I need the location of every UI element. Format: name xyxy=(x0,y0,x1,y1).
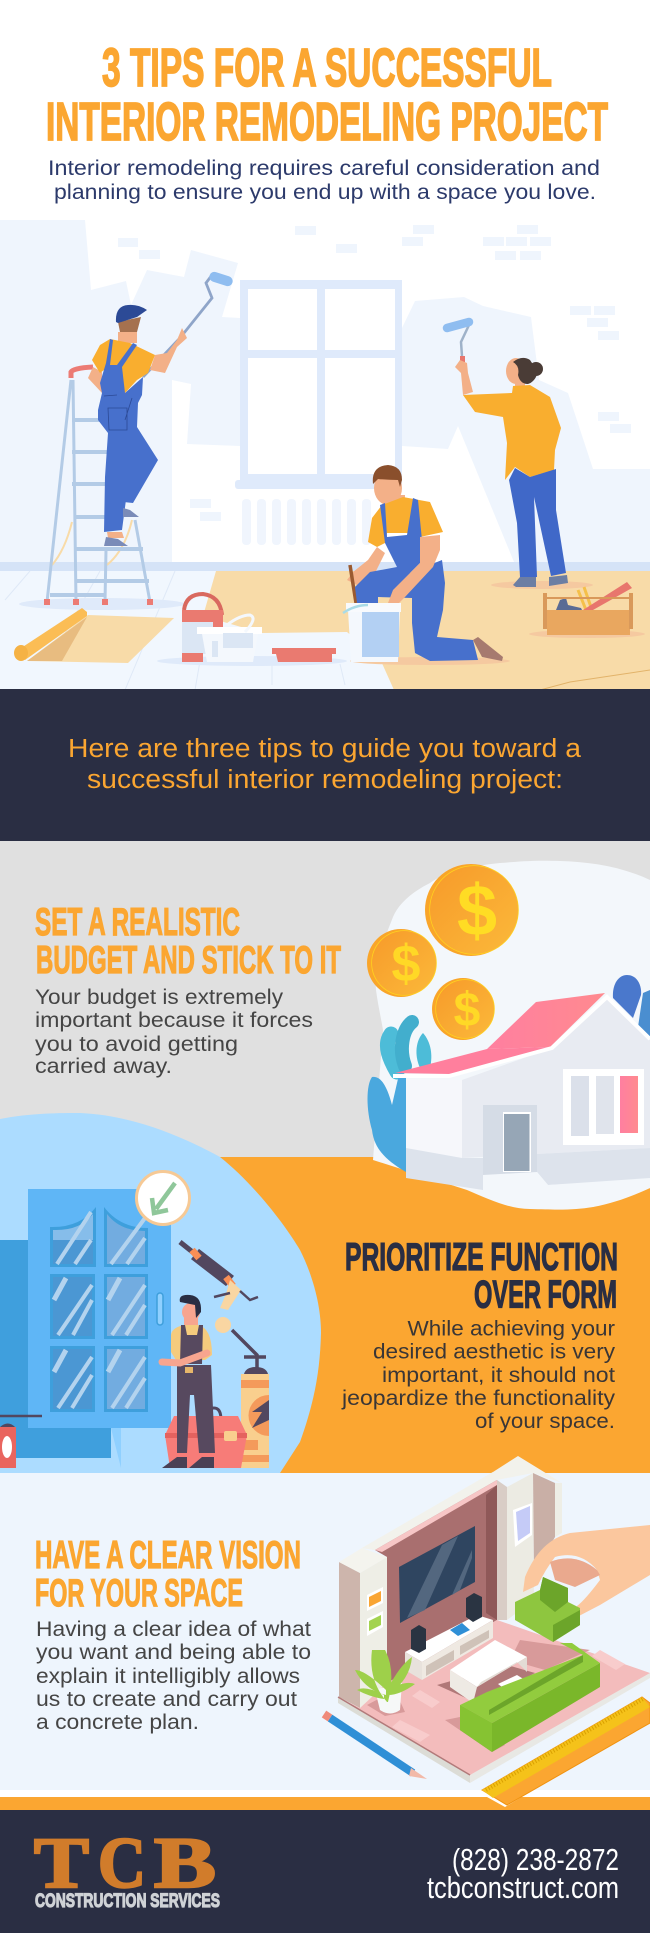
icon: coins: $ xyxy=(454,984,481,1037)
icon: red spray can xyxy=(0,1416,42,1468)
footer stripe xyxy=(0,1797,650,1810)
logo: C xyxy=(98,1823,146,1903)
icon: house xyxy=(393,993,650,1209)
logo: CONSTRUCTION SERVICES xyxy=(35,1891,220,1912)
blob behind house xyxy=(373,861,650,1210)
painter kneeling xyxy=(343,465,510,665)
heading: budget: BUDGET AND STICK TO IT xyxy=(36,939,341,982)
illustration: isometric room model xyxy=(324,1456,650,1807)
paper roll and sheet xyxy=(14,608,174,663)
text: vision: Having a clear idea of what xyxy=(36,1617,311,1641)
painter woman xyxy=(447,322,593,589)
logo xyxy=(34,1823,220,1912)
sofa xyxy=(460,1643,600,1752)
rug and coffee table xyxy=(437,1640,535,1703)
text: function over form: of your space. xyxy=(475,1409,615,1433)
hand and armchair xyxy=(515,1525,650,1642)
text: vision: a concrete plan. xyxy=(36,1710,199,1734)
heading: vision: HAVE A CLEAR VISION xyxy=(35,1534,301,1577)
heading: vision xyxy=(35,1534,301,1615)
icon: red toolbox xyxy=(165,1408,247,1468)
tv xyxy=(399,1526,475,1623)
room floor xyxy=(338,1620,650,1783)
tips intro band: successful interior remodeling project: xyxy=(87,766,563,794)
tips intro band: Here are three tips to guide you toward a xyxy=(68,735,582,763)
heading: function over form xyxy=(345,1236,618,1316)
text: function over form: important, it should not xyxy=(382,1363,615,1387)
text: vision: us to create and carry out xyxy=(36,1687,297,1711)
icon: coins: $ xyxy=(457,871,497,951)
room walls xyxy=(339,1456,562,1708)
floor xyxy=(0,562,650,690)
plant xyxy=(355,1650,415,1714)
text: function over form xyxy=(341,1316,615,1433)
text: vision xyxy=(36,1617,311,1734)
text: budget: you to avoid getting xyxy=(35,1032,238,1056)
door panes xyxy=(50,1207,163,1412)
text: vision: you want and being able to xyxy=(36,1640,311,1664)
icon: coins xyxy=(367,864,518,1040)
door wall shadow xyxy=(0,1240,111,1458)
intro text: Interior remodeling requires careful consideration and xyxy=(48,156,600,180)
intro text xyxy=(48,156,600,204)
panel: budget xyxy=(0,841,650,1473)
heading: budget: SET A REALISTIC xyxy=(35,901,240,944)
ruler xyxy=(478,1697,650,1807)
text: budget: important because it forces xyxy=(35,1008,313,1032)
illustration: painters remodeling a room xyxy=(0,220,650,690)
tips intro band xyxy=(0,689,650,841)
logo: B xyxy=(154,1823,216,1903)
heading: budget xyxy=(35,901,341,982)
wall paint patches xyxy=(0,220,650,562)
icon: check bubble xyxy=(136,1172,190,1224)
tv stand and speakers xyxy=(405,1593,493,1680)
heading: vision: FOR YOUR SPACE xyxy=(35,1572,243,1615)
title xyxy=(46,38,608,152)
text: budget: carried away. xyxy=(35,1054,172,1078)
pencil xyxy=(324,1714,427,1779)
icon: worker xyxy=(162,1295,215,1468)
text: function over form: While achieving your xyxy=(408,1316,615,1340)
icon: foam can xyxy=(215,1317,269,1468)
contact xyxy=(427,1842,619,1905)
footer xyxy=(0,1810,650,1933)
text: budget: Your budget is extremely xyxy=(35,985,283,1009)
panel: function background xyxy=(0,1157,650,1473)
icon: caulk gun xyxy=(180,1242,258,1310)
text: function over form: desired aesthetic is very xyxy=(373,1340,615,1364)
text: vision: explain it intelligibly allows xyxy=(36,1664,300,1688)
icon: coins: $ xyxy=(392,935,421,993)
painter on ladder xyxy=(88,271,234,546)
panel: door illustration xyxy=(0,1113,321,1473)
panel: vision xyxy=(0,1456,650,1810)
window xyxy=(235,280,402,489)
toolbox xyxy=(529,582,645,638)
logo: T xyxy=(34,1823,89,1903)
ladder xyxy=(19,367,185,610)
radiator xyxy=(242,499,371,545)
text: budget xyxy=(35,985,313,1078)
door xyxy=(28,1189,171,1428)
text: function over form: jeopardize the functionality xyxy=(341,1386,615,1410)
intro text: planning to ensure you end up with a space you love. xyxy=(54,180,596,204)
paint cans and tray xyxy=(157,594,347,666)
icon: plants xyxy=(368,975,650,1172)
